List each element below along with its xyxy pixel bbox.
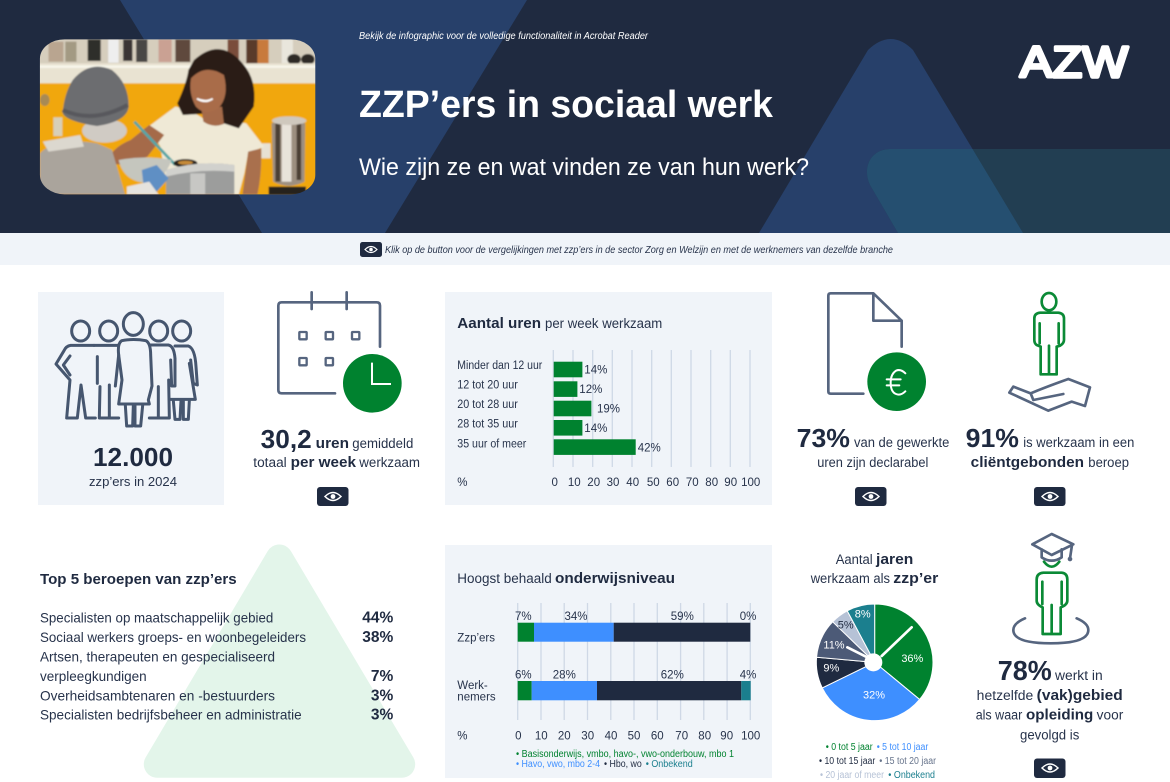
stat text: werkzaam	[358, 455, 420, 470]
list of professions: Specialisten bedrijfsbeheer en administratie	[40, 707, 302, 723]
pie legend: • 5 tot 10 jaar	[877, 742, 929, 753]
axis: %	[457, 730, 468, 742]
axis: 10	[535, 730, 548, 742]
panel: 73% declarabel	[797, 293, 949, 506]
bar values: 0%	[740, 611, 756, 623]
axis: 70	[686, 477, 699, 489]
legend: • Basisonderwijs, vmbo, havo-, vwo-onderbouw, mbo 1	[516, 749, 734, 760]
subtitle: Wie zijn ze en wat vinden ze van hun werk?	[359, 154, 809, 181]
bar values: 7%	[515, 611, 532, 623]
stat text: 30,2	[261, 424, 312, 454]
stat text: gevolgd is	[1020, 727, 1080, 742]
bar values: 4%	[740, 669, 756, 681]
axis: 30	[581, 730, 594, 742]
axis: 20	[587, 477, 600, 489]
pie title	[810, 551, 938, 587]
bar values: 14%	[584, 423, 607, 435]
list of professions	[40, 609, 306, 723]
axis: 100	[741, 477, 760, 489]
icon: group of people	[56, 313, 197, 426]
legend: • Onbekend	[646, 759, 693, 770]
list of professions: verpleegkundigen	[40, 668, 147, 684]
chart title	[457, 570, 675, 587]
list of professions: Sociaal werkers groeps- en woonbegeleiders	[40, 629, 306, 645]
pie chart: 5%	[838, 619, 854, 631]
pie title: werkzaam als	[810, 571, 890, 586]
list of professions: Overheidsambtenaren en -bestuurders	[40, 687, 275, 703]
axis: 10	[568, 477, 581, 489]
axis: 70	[675, 730, 688, 742]
chart title: Aantal uren	[457, 315, 541, 332]
axis: 90	[720, 730, 733, 742]
title: ZZP’ers in sociaal werk	[359, 84, 774, 126]
icon: calendar with clock	[278, 292, 402, 413]
panel: top 5 beroepen	[40, 558, 402, 764]
stat text: totaal	[253, 455, 287, 470]
stat text: cliëntgebonden	[971, 454, 1084, 471]
bar values	[579, 364, 661, 454]
axis	[457, 477, 760, 489]
panel: onderwijsniveau chart	[445, 545, 772, 778]
axis: 0	[515, 730, 522, 742]
bar values: 28%	[553, 669, 576, 681]
stat text: is werkzaam in een	[1023, 435, 1134, 450]
stat text: beroep	[1088, 455, 1129, 470]
axis: %	[457, 477, 468, 489]
category labels: Zzp’ers	[457, 633, 495, 645]
pie chart: 32%	[863, 689, 885, 701]
axis: 20	[558, 730, 571, 742]
chart title: Hoogst behaald	[457, 571, 552, 586]
percentages: 38%	[362, 629, 394, 646]
axis: 40	[605, 730, 617, 742]
stat text: van de gewerkte	[854, 435, 949, 450]
bar values: 12%	[579, 384, 602, 396]
icon: eye button	[1034, 758, 1066, 778]
category labels	[457, 633, 496, 704]
stat text: per week	[291, 454, 357, 471]
bar values: 59%	[671, 611, 694, 623]
bars	[554, 362, 636, 455]
pie title: jaren	[875, 551, 913, 568]
header photo	[37, 37, 317, 197]
category labels	[457, 360, 542, 450]
stat text: gemiddeld	[352, 436, 413, 451]
list of professions: Artsen, therapeuten en gespecialiseerd	[40, 649, 275, 665]
axis: 40	[626, 477, 639, 489]
axis: 80	[698, 730, 711, 742]
axis	[457, 730, 760, 742]
list of professions: Specialisten op maatschappelijk gebied	[40, 609, 273, 625]
icon: person above hand	[1009, 293, 1090, 411]
stat: 12.000: 12.000	[93, 442, 173, 472]
stacked bar: zzp'ers	[518, 623, 750, 642]
axis: 50	[647, 477, 660, 489]
category labels: Minder dan 12 uur	[457, 360, 542, 372]
caption: zzp’ers in 2024	[89, 474, 177, 489]
pie legend: • 20 jaar of meer	[820, 770, 885, 781]
instruction band	[0, 233, 1170, 265]
stat text: uren	[316, 435, 349, 452]
bar values: 14%	[584, 364, 607, 376]
pie chart: 11%	[823, 639, 845, 651]
pie legend: • Onbekend	[888, 770, 935, 781]
pie legend: • 0 tot 5 jaar	[826, 742, 873, 753]
bar values: 19%	[597, 403, 620, 415]
decorative triangle	[157, 558, 402, 764]
percentages: 44%	[362, 609, 394, 626]
instruction text: Klik op de button voor de vergelijkingen met zzp’ers in de sector Zorg en Welzijn en met de werknemers van dezelfde branche	[385, 245, 893, 256]
category labels: Werk-	[457, 680, 488, 692]
axis: 30	[607, 477, 619, 489]
stacked bar: werknemers	[518, 681, 751, 700]
panel: 12.000 zzp'ers	[38, 292, 224, 505]
pie title: Aantal	[836, 552, 873, 567]
icon: eye button	[360, 242, 382, 257]
stat text: (vak)gebied	[1037, 687, 1123, 704]
stat text	[253, 424, 420, 471]
axis: 60	[651, 730, 664, 742]
panel: aantal jaren pie	[810, 551, 938, 781]
pie chart: 8%	[855, 608, 871, 620]
stat text: 73%	[797, 423, 850, 453]
panel: 91% cliëntgebonden	[966, 293, 1134, 506]
percentages	[362, 609, 394, 724]
stat text: 78%	[998, 655, 1052, 686]
legend: • Havo, vwo, mbo 2-4	[516, 759, 600, 770]
header banner	[0, 0, 1170, 233]
percentages: 7%	[371, 668, 394, 685]
stat text	[976, 655, 1124, 742]
chart title	[457, 315, 662, 332]
logo: AZW	[1020, 38, 1129, 87]
chart title: per week werkzaam	[545, 316, 662, 331]
axis: 0	[551, 477, 558, 489]
panel: bar chart aantal uren	[445, 292, 772, 505]
stat text: 91%	[966, 423, 1019, 453]
icon: graduate on ring	[1013, 534, 1088, 643]
bar values: 42%	[638, 442, 661, 454]
pie chart: 9%	[823, 662, 839, 674]
axis: 50	[628, 730, 640, 742]
pie chart: 36%	[901, 653, 924, 665]
heading: Top 5 beroepen van zzp’ers	[40, 571, 237, 588]
axis: 80	[705, 477, 718, 489]
category labels: 20 tot 28 uur	[457, 399, 518, 411]
axis: 100	[741, 730, 760, 742]
bar values: 34%	[564, 611, 588, 623]
panel: 78% opleiding	[976, 534, 1124, 778]
stat text: hetzelfde	[977, 688, 1033, 703]
legend: • Hbo, wo	[604, 759, 642, 770]
header note: Bekijk de infographic voor de volledige functionaliteit in Acrobat Reader	[359, 31, 649, 42]
icon: eye button	[855, 487, 886, 506]
pie legend: • 10 tot 15 jaar	[819, 756, 876, 767]
stat text: werkt in	[1054, 668, 1103, 683]
pie chart	[816, 604, 933, 721]
stat text	[797, 423, 949, 470]
stat text	[966, 423, 1134, 471]
bar values: 6%	[515, 669, 532, 681]
panel: 30,2 uren	[253, 292, 420, 506]
pie title: zzp’er	[893, 570, 938, 587]
icon: document with euro	[828, 293, 926, 411]
pie legend: • 15 tot 20 jaar	[879, 756, 937, 767]
icon: eye button	[1034, 487, 1066, 506]
stat text: als waar	[976, 707, 1023, 722]
bar values	[515, 611, 756, 681]
category labels: nemers	[457, 692, 496, 704]
chart title: onderwijsniveau	[555, 570, 675, 587]
icon: eye button	[317, 487, 348, 506]
legend	[516, 749, 734, 770]
stat text: opleiding	[1026, 706, 1093, 723]
category labels: 12 tot 20 uur	[457, 380, 518, 392]
axis: 90	[724, 477, 737, 489]
percentages: 3%	[371, 707, 394, 724]
bar values: 62%	[661, 669, 684, 681]
category labels: 35 uur of meer	[457, 438, 526, 450]
percentages: 3%	[371, 687, 394, 704]
stat text: uren zijn declarabel	[817, 455, 928, 470]
axis: 60	[666, 477, 679, 489]
stat text: voor	[1097, 707, 1124, 722]
pie legend	[819, 742, 937, 781]
category labels: 28 tot 35 uur	[457, 419, 518, 431]
